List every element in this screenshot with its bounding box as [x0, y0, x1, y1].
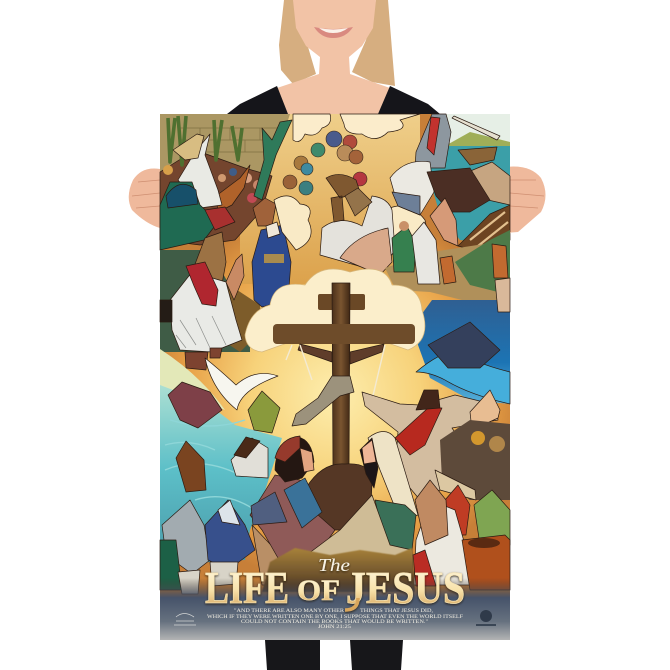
title: OF: OF: [297, 574, 340, 607]
panel: Jesus arms outstretched: [362, 390, 500, 500]
model hair: [279, 0, 395, 86]
boy green: [392, 226, 416, 272]
panel: sermon figure seated: [160, 232, 262, 370]
side figure: [495, 278, 510, 312]
J tail: [345, 598, 358, 610]
dark ground left: [160, 250, 250, 352]
orange figures: [440, 244, 508, 284]
quote line 3: COULD NOT CONTAIN THE BOOKS THAT WOULD BE WRITTEN.": [241, 619, 428, 625]
white robed servant: [414, 500, 470, 585]
rider veil: [173, 134, 204, 160]
hair and veil: [192, 232, 226, 295]
red sash: [413, 550, 436, 586]
blue robe: [252, 225, 291, 307]
teal water: [160, 375, 282, 565]
yellow heads: [471, 431, 505, 452]
robe: [362, 392, 498, 500]
green man: [474, 490, 510, 545]
man left brown: [176, 441, 206, 492]
title: The: The: [318, 555, 350, 575]
panel: right crowd and wine jars: [413, 420, 510, 590]
crowd: [160, 150, 272, 245]
title: LIFE: LIFE: [205, 562, 289, 613]
bright sky: [435, 114, 510, 150]
cloak headcloth: [166, 184, 198, 208]
scripture quote: [207, 608, 463, 630]
crossbeam: [273, 324, 415, 344]
hair: [234, 437, 260, 458]
sandals: [185, 348, 222, 370]
giant white sleeve: [390, 161, 434, 215]
hill: [222, 280, 262, 352]
raised arm: [226, 254, 244, 300]
cap: [275, 436, 300, 462]
poster: [160, 114, 510, 640]
upper clouds: [293, 114, 420, 142]
man green robe: [248, 391, 280, 433]
striped sleeve: [458, 205, 510, 252]
palm frond: [254, 120, 292, 200]
red sash: [186, 262, 218, 306]
armour shoulder: [251, 492, 287, 525]
model smile: [314, 27, 353, 38]
jar mouths: [468, 538, 500, 548]
upper short beam: [318, 294, 365, 310]
panel: cross and clouds: [245, 269, 425, 472]
wall courses: [180, 128, 280, 152]
grey cloak figure: [162, 500, 210, 574]
giant robe folds: [320, 196, 395, 272]
cloud left of robe: [274, 196, 311, 250]
green scarf: [375, 500, 416, 550]
quote line 1 left: "AND THERE ARE ALSO MANY OTHER: [234, 608, 344, 614]
crowd circles: [283, 131, 367, 195]
panel: palm sunday entry: [160, 114, 292, 250]
blue elder: [205, 500, 255, 570]
baptized man: [231, 438, 268, 478]
head veil: [266, 222, 280, 238]
model right hand: [505, 166, 546, 233]
donkey: [216, 165, 250, 212]
panel: loaves and fishes: [385, 221, 510, 302]
light beam: [160, 349, 225, 410]
tan dress: [300, 495, 414, 590]
green cloak figure: [160, 182, 218, 250]
panel: bottom-left healing group: [160, 500, 255, 594]
panel: mound at cross base: [306, 464, 372, 530]
woman hair: [360, 438, 378, 488]
boy head: [399, 221, 409, 231]
white robe: [170, 272, 242, 352]
panel: sea of galilee boats and healing: [390, 114, 510, 252]
man cloak: [250, 475, 335, 565]
panel: storm sea: [416, 278, 510, 404]
dark bench: [160, 300, 172, 322]
sea water: [420, 146, 510, 245]
logo left: [174, 614, 196, 625]
turban: [468, 162, 510, 205]
veil brown: [415, 480, 448, 545]
robe folds: [176, 316, 226, 348]
three people in water: [168, 382, 222, 428]
crowd heads: [163, 165, 263, 203]
waves: [416, 350, 510, 404]
blue-grey shadow: [392, 192, 420, 215]
stripes: [470, 212, 510, 248]
Jesus white: [412, 222, 440, 284]
red stole: [427, 117, 440, 155]
boat: [458, 147, 497, 165]
reaching hand: [430, 198, 458, 246]
model face and chest: [277, 0, 390, 114]
poster background sky: [160, 114, 510, 640]
quote reference: JOHN 21:25: [318, 624, 351, 630]
legs and sandals: [178, 562, 238, 594]
rider white robe: [178, 134, 222, 208]
finger creases: [132, 180, 544, 208]
title band fade: [160, 578, 510, 640]
sea: [416, 300, 510, 404]
panel: woman with water jar: [252, 198, 291, 307]
model holding the poster: [129, 0, 546, 670]
arm silhouette: [298, 344, 384, 364]
belt: [264, 254, 284, 263]
water stones: [435, 470, 476, 500]
woman face: [362, 440, 376, 464]
jar: [253, 198, 276, 226]
jars: [462, 535, 510, 590]
crowd hillside: [385, 240, 510, 302]
straw field: [262, 548, 415, 592]
blue tunic: [284, 478, 322, 528]
draped shroud: [292, 376, 354, 426]
crowd background: [440, 420, 510, 500]
beard and face: [427, 168, 490, 212]
elder veil and beard: [218, 500, 240, 525]
quote line 2: WHICH IF THEY WERE WRITTEN ONE BY ONE, I SUPPOSE THAT EVEN THE WORLD ITSELF: [207, 614, 463, 620]
plants: [168, 116, 242, 165]
dove wings: [205, 358, 278, 410]
green plant: [160, 540, 182, 590]
stone wall: [160, 114, 290, 210]
red dress woman: [445, 485, 470, 535]
panel: couple at foot of cross: [250, 432, 418, 590]
cloud right of robe: [390, 206, 426, 250]
hand: [470, 390, 500, 430]
legs: [345, 188, 372, 216]
logo right: [476, 610, 496, 626]
quote line 1 right: THINGS THAT JESUS DID,: [360, 608, 434, 614]
model black top: [227, 86, 440, 114]
top heavenly panel: [240, 114, 420, 284]
model teeth: [319, 28, 348, 33]
model legs: [265, 640, 403, 670]
sinking hull: [428, 322, 500, 368]
pink sash folds: [340, 228, 392, 275]
panel: sower and many groups: [274, 114, 426, 275]
red sash: [395, 408, 442, 455]
man lower robe: [252, 525, 302, 585]
title: JESUS: JESUS: [346, 562, 465, 613]
model left hand: [129, 168, 160, 228]
title lettering: [205, 555, 465, 613]
vertical beam: [332, 283, 350, 472]
clouds behind cross: [245, 269, 425, 352]
green hill: [445, 132, 510, 150]
ripples: [165, 420, 255, 510]
woman veil: [368, 432, 418, 520]
giant sandals: [326, 174, 360, 222]
ropes and lightning: [286, 345, 385, 400]
standing figure: [415, 114, 451, 168]
red bundle: [205, 207, 235, 230]
hair: [416, 390, 440, 410]
panel: baptism water: [160, 349, 282, 565]
face: [300, 448, 314, 472]
head: [275, 437, 314, 482]
green field: [455, 230, 510, 295]
sail: [452, 116, 500, 140]
